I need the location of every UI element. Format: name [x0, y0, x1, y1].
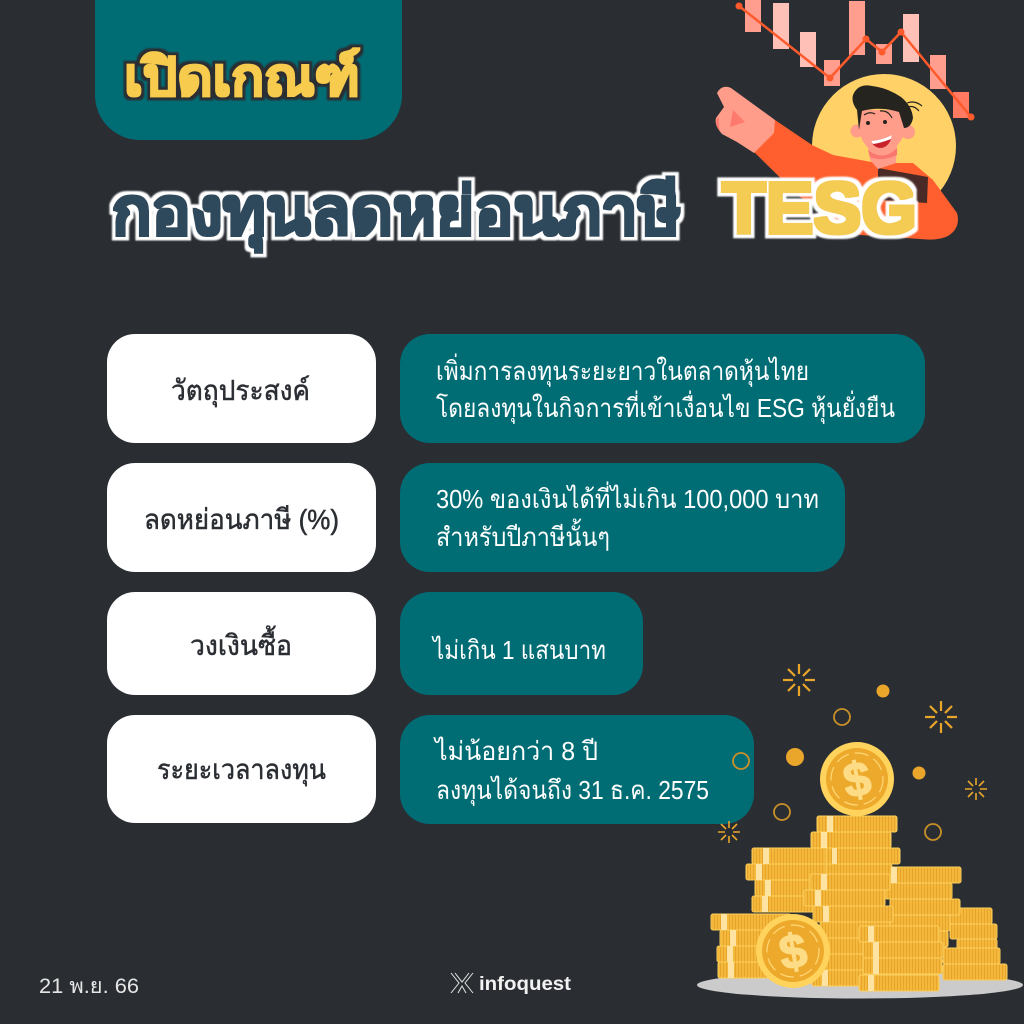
title: TESG: TESG [722, 169, 917, 249]
row: holding period detail [400, 715, 754, 824]
illustration: pointing man [716, 74, 958, 240]
icon: top dollar coin [820, 742, 894, 816]
row: holding period detail: ลงทุนได้จนถึง 31 ธ.ค. 2575 [436, 775, 709, 806]
icon: front dollar coin: $ [776, 924, 811, 981]
row: objective detail: โดยลงทุนในกิจการที่เข้าเงื่อนไข ESG หุ้นยั่งยืน [436, 390, 895, 424]
illustration: falling stock chart [736, 0, 974, 120]
row: objective label: วัตถุประสงค์ [171, 375, 310, 408]
row: purchase limit detail [400, 592, 643, 695]
row: tax deduction label: ลดหย่อนภาษี (%) [144, 504, 339, 535]
row: objective label [107, 334, 376, 443]
row: purchase limit label: วงเงินซื้อ [190, 625, 292, 661]
row: tax deduction detail: 30% ของเงินได้ที่ไม่เกิน 100,000 บาท [436, 481, 819, 514]
illustration: sparkles around coins [718, 664, 987, 843]
row: holding period label: ระยะเวลาลงทุน [157, 754, 326, 787]
footer: infoquest logo [451, 973, 572, 995]
row: purchase limit label [107, 592, 376, 695]
panel: heading tab [95, 0, 402, 140]
row: holding period label [107, 715, 376, 823]
footer: infoquest logo: infoquest [479, 974, 572, 995]
footer: date: 21 พ.ย. 66 [39, 975, 139, 998]
row: tax deduction label [107, 463, 376, 572]
heading: เปิดเกณฑ์: เปิดเกณฑ์ [124, 48, 360, 107]
row: purchase limit detail: ไม่เกิน 1 แสนบาท [431, 635, 606, 665]
row: tax deduction detail [400, 463, 845, 572]
title: กองทุนลดหย่อนภาษี: กองทุนลดหย่อนภาษี [112, 174, 681, 253]
row: tax deduction detail: สำหรับปีภาษีนั้นๆ [436, 518, 610, 552]
illustration: coin stacks [697, 742, 1023, 998]
row: objective detail [400, 334, 925, 443]
row: holding period detail: ไม่น้อยกว่า 8 ปี [433, 736, 598, 766]
row: objective detail: เพิ่มการลงทุนระยะยาวในตลาดหุ้นไทย [436, 353, 809, 387]
icon: top dollar coin: $ [840, 752, 875, 809]
icon: front dollar coin [756, 914, 830, 988]
